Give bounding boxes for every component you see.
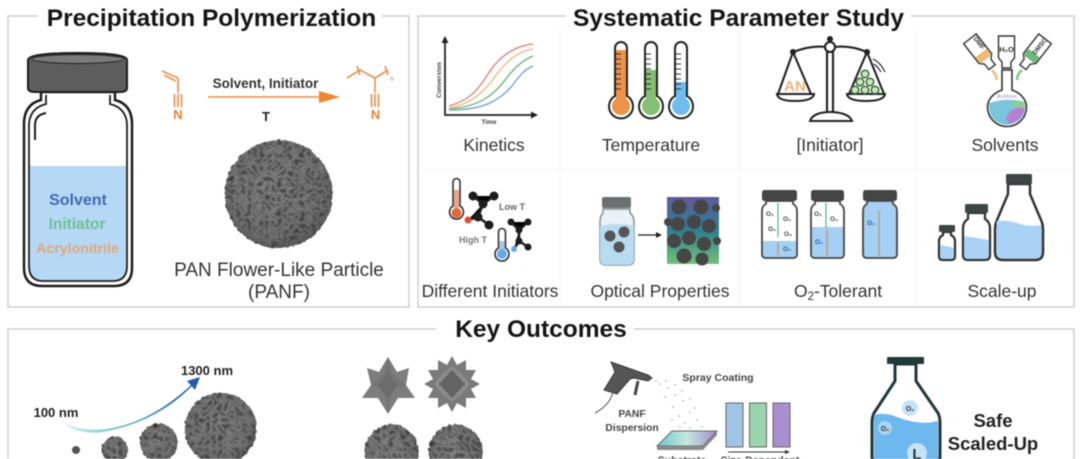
morphologies: stars and spheres	[362, 356, 482, 459]
panel: key outcomes	[8, 316, 1074, 459]
reaction scheme: n	[390, 76, 394, 83]
vial contents labels: Solvent	[49, 192, 108, 209]
label: O2-tolerant: O	[794, 281, 808, 301]
icon: thermometers	[609, 42, 693, 118]
icon: oxygen-tolerant vials	[762, 190, 897, 258]
icon: different initiators: Low T	[499, 202, 525, 212]
icon: safe scaled-up bottle	[872, 357, 940, 459]
reaction scheme	[162, 66, 394, 124]
label: solvents: Solvents	[971, 135, 1039, 155]
icon: oxygen-tolerant vials: O₂	[830, 216, 838, 223]
label: PANF: PAN Flower-Like Particle	[174, 260, 384, 281]
icon: solvent flask: H₂O	[999, 45, 1014, 54]
reaction scheme: N	[173, 107, 183, 122]
label: scale-up: Scale-up	[967, 281, 1037, 301]
icon: scale-up bottles	[939, 174, 1043, 260]
icon: balance scale: AN	[784, 78, 806, 95]
reaction scheme: Solvent, Initiator	[213, 76, 319, 91]
chart: particle size range: 100 nm	[34, 405, 78, 420]
chart: particle size range	[34, 363, 256, 459]
reaction scheme: N	[371, 107, 380, 122]
icon: oxygen-tolerant vials: O₂	[768, 226, 776, 233]
icon: balance scale	[777, 37, 885, 121]
label: initiator: [Initiator]	[796, 135, 864, 155]
label: PANF: (PANF)	[248, 282, 310, 303]
spray coating diagram	[595, 362, 800, 459]
icon: oxygen-tolerant vials: O₂	[815, 239, 823, 246]
label: safe scaled-up: Safe	[973, 410, 1013, 431]
label: O2-tolerant: -Tolerant	[814, 281, 882, 301]
vial contents labels: Initiator	[49, 216, 105, 233]
icon: different initiators: High T	[459, 235, 487, 245]
icon: reaction vial	[24, 53, 132, 286]
heading: precipitation polymerization: Precipitation Polymerization	[47, 5, 376, 32]
icon: oxygen-tolerant vials: O₂	[784, 231, 792, 238]
vial contents labels: Acrylonitrile	[36, 241, 119, 257]
icon: safe scaled-up bottle: O₂	[906, 406, 914, 413]
icon: solvent flask	[964, 33, 1052, 127]
icon: optical properties	[600, 197, 721, 266]
chart: kinetics	[436, 36, 538, 126]
icon: solvent flask: DMF	[972, 36, 986, 51]
vial contents labels	[36, 192, 119, 257]
label: optical properties: Optical Properties	[590, 281, 730, 301]
spray coating diagram: PANF	[618, 409, 646, 420]
icon: oxygen-tolerant vials: O₂	[783, 216, 791, 223]
icon: solvent flask: Acetone	[997, 94, 1017, 100]
chart: particle size range: 1300 nm	[181, 363, 233, 378]
spray coating diagram: Spray Coating	[682, 372, 754, 384]
reaction scheme: T	[262, 109, 270, 124]
panel: precipitation polymerization	[8, 5, 409, 307]
icon: solvent flask: DMSO	[1032, 37, 1049, 56]
panel: systematic parameter study	[418, 5, 1074, 307]
chart: kinetics: Conversion	[436, 62, 443, 98]
heading: key outcomes: Key Outcomes	[455, 316, 627, 343]
icon: oxygen-tolerant vials: O₂	[814, 211, 822, 218]
spray coating diagram: Dispersion	[605, 423, 659, 434]
icon: oxygen-tolerant vials: O₂	[867, 220, 875, 227]
particle: PAN flower-like sphere	[224, 140, 332, 248]
label: temperature: Temperature	[602, 135, 700, 155]
label: O2-tolerant: 2	[808, 291, 814, 303]
label: different initiators: Different Initiators	[422, 281, 559, 301]
heading: systematic parameter study: Systematic Parameter Study	[573, 5, 904, 32]
label: safe scaled-up: Scaled-Up	[948, 433, 1038, 454]
chart: kinetics: Time	[481, 119, 497, 126]
icon: oxygen-tolerant vials: O₂	[766, 211, 774, 218]
label: kinetics: Kinetics	[463, 135, 525, 155]
icon: safe scaled-up bottle: O₂	[881, 426, 889, 433]
icon: oxygen-tolerant vials: O₂	[783, 246, 791, 253]
icon: different initiators	[450, 179, 532, 261]
